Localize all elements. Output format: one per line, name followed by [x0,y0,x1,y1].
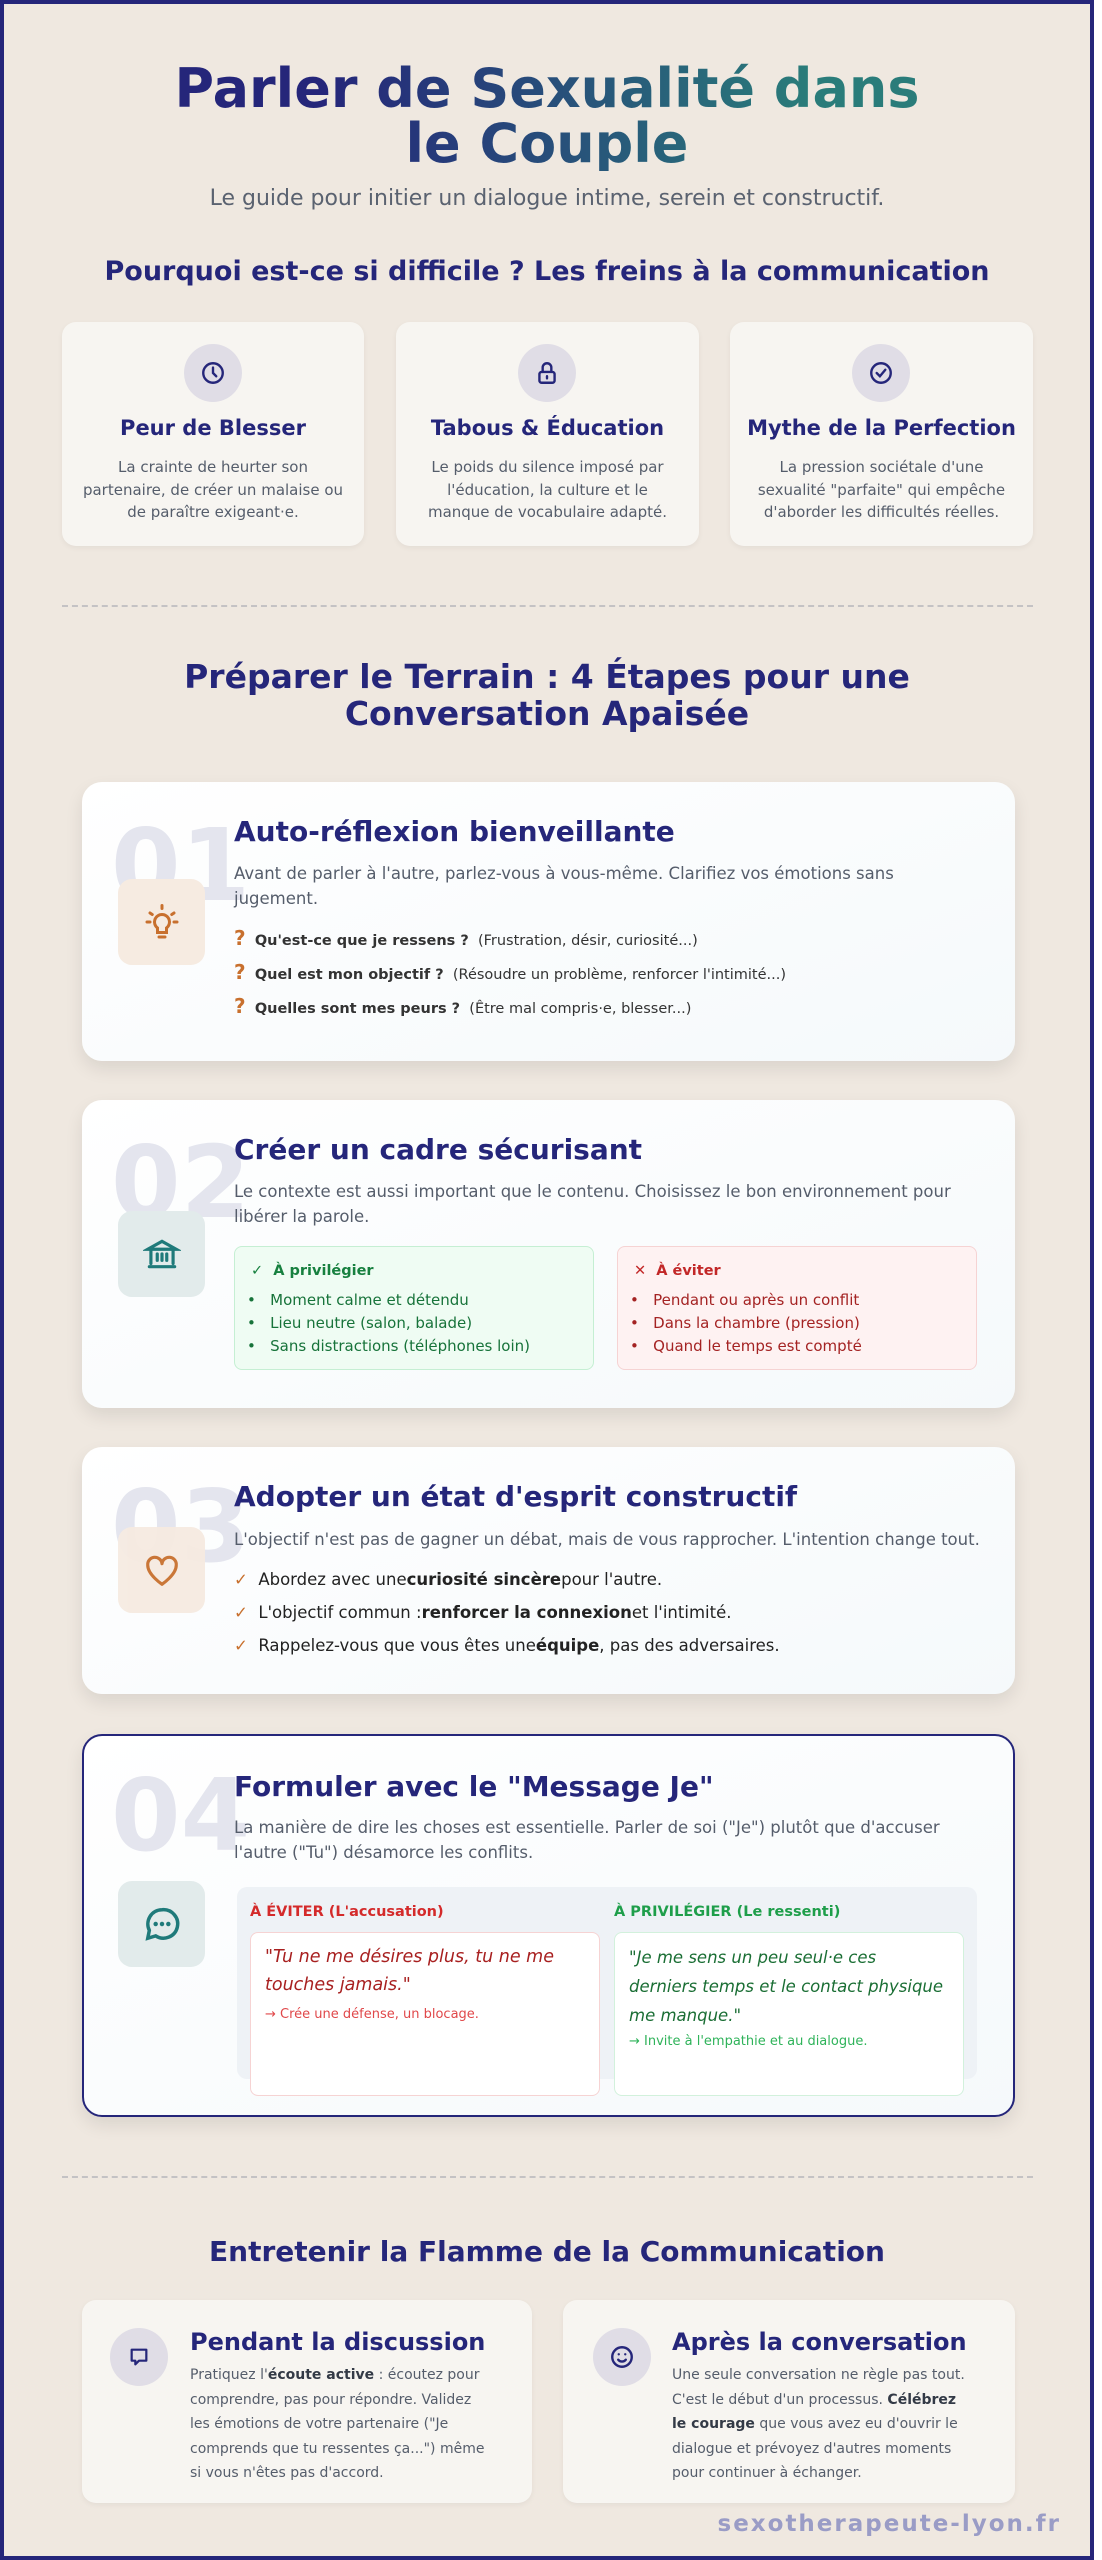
card text: manque de vocabulaire adapté. [428,503,667,521]
card text [428,458,667,521]
text: comprendre, pas pour répondre. Validez [190,2392,471,2408]
quote: je: "Je me sens un peu seul·e ces [629,1948,876,1967]
icon: lock [518,344,576,402]
box: à privilégier [234,1246,594,1370]
questions list: ? Quel est mon objectif ? (Résoudre un problème, renforcer l'intimité...) [234,960,786,984]
heading: freins: Pourquoi est-ce si difficile ? Les freins à la communication [104,256,990,287]
heading: entretenir: Entretenir la Flamme de la Communication [209,2235,885,2268]
quote: tu: touches jamais." [265,1975,411,1995]
panel: step 04 [82,1734,1015,2117]
title [174,57,920,175]
icon: smile [593,2328,651,2386]
number 04: 04 [111,1757,250,1874]
number 01: 01 [111,807,250,924]
icon: check circle [852,344,910,402]
panel: pendant [82,2300,532,2503]
icon: clock [184,344,242,402]
step text: l'autre ("Tu") désamorce les conflits. [234,1843,533,1862]
card text: sexualité "parfaite" qui empêche [758,480,1005,498]
title: le Couple [406,112,688,175]
quote: je [614,1932,964,2096]
text: comprends que tu ressentes ça...") même [190,2440,484,2456]
card text: La pression sociétale d'une [780,458,983,476]
step title: Créer un cadre sécurisant [234,1133,642,1166]
step text: libérer la parole. [234,1207,369,1226]
panel: mythe [730,322,1033,546]
panel: step 02 [82,1100,1015,1408]
checklist: ✓ L'objectif commun :renforcer la connexionet l'intimité. [234,1603,731,1622]
title: Après la conversation [672,2328,967,2356]
panel: step 01 [82,782,1015,1061]
box: à privilégier: • Sans distractions (téléphones loin) [247,1337,530,1355]
icon: chat [118,1881,205,1967]
text: Pratiquez l'écoute active : écoutez pour [190,2367,480,2383]
panel: après [563,2300,1015,2503]
step text [234,864,894,908]
heading: étapes: Préparer le Terrain : 4 Étapes pour une [184,657,910,696]
quote: je: → Invite à l'empathie et au dialogue. [629,2034,867,2049]
card text: de paraître exigeant·e. [127,503,299,521]
panel: step 03 [82,1447,1015,1694]
step text: L'objectif n'est pas de gagner un débat, mais de vous rapprocher. L'intention change tout. [234,1530,980,1549]
icon: heart [118,1527,205,1613]
step title: Auto-réflexion bienveillante [234,815,675,848]
quote: je: derniers temps et le contact physique [629,1977,943,1996]
box: à éviter [617,1246,977,1370]
comparison panel [237,1887,977,2079]
step text: Le contexte est aussi important que le contenu. Choisissez le bon environnement pour [234,1182,951,1201]
box: à privilégier: ✓ À privilégier [251,1263,374,1279]
icon: speech [110,2328,168,2386]
text: les émotions de votre partenaire ("Je [190,2416,448,2432]
checklist: ✓ Rappelez-vous que vous êtes uneéquipe, pas des adversaires. [234,1636,780,1655]
text: le courage que vous avez eu d'ouvrir le [672,2416,958,2432]
footer: sexotherapeute-lyon.fr [718,2511,1061,2537]
box: à éviter: • Quand le temps est compté [630,1337,862,1355]
quote: je: me manque." [629,2006,741,2025]
box: à privilégier: • Moment calme et détendu [247,1291,469,1309]
card text: d'aborder les difficultés réelles. [764,503,999,521]
card title: Tabous & Éducation [431,416,664,440]
text: pour continuer à échanger. [672,2465,862,2481]
box: à éviter: ✕ À éviter [634,1263,721,1279]
panel: peur de blesser [62,322,364,546]
quote: tu: → Crée une défense, un blocage. [265,2007,479,2022]
questions list: ? Qu'est-ce que je ressens ? (Frustration, désir, curiosité...) [234,926,698,950]
card title: Mythe de la Perfection [747,416,1016,440]
quote: tu: "Tu ne me désires plus, tu ne me [265,1947,554,1967]
box: à éviter: • Dans la chambre (pression) [630,1314,860,1332]
step text: La manière de dire les choses est essentielle. Parler de soi ("Je") plutôt que d'accuser [234,1818,940,1837]
step text [234,1182,951,1226]
icon: building [118,1211,205,1297]
title: Parler de Sexualité dans [174,57,920,120]
number 02: 02 [111,1124,250,1241]
subtitle: Le guide pour initier un dialogue intime, serein et constructif. [210,186,884,211]
number 03: 03 [111,1468,250,1585]
card text: La crainte de heurter son [118,458,308,476]
box: à privilégier: • Lieu neutre (salon, balade) [247,1314,472,1332]
card text: Le poids du silence imposé par [431,458,664,476]
text: C'est le début d'un processus. Célébrez [672,2392,956,2408]
quote: tu [250,1932,600,2096]
card title: Peur de Blesser [120,416,306,440]
step title: Adopter un état d'esprit constructif [234,1480,797,1513]
card text: partenaire, de créer un malaise ou [83,480,343,498]
label: éviter: À ÉVITER (L'accusation) [250,1904,444,1920]
step text: jugement. [234,889,318,908]
checklist: ✓ Abordez avec unecuriosité sincèrepour l'autre. [234,1570,662,1589]
card text [758,458,1005,521]
text: dialogue et prévoyez d'autres moments [672,2440,951,2456]
card text: l'éducation, la culture et le [447,480,648,498]
card text [83,458,343,521]
text [672,2367,965,2481]
icon: bulb [118,879,205,965]
label: privilégier: À PRIVILÉGIER (Le ressenti) [614,1904,840,1920]
step text [234,1818,940,1862]
questions list [234,926,786,1018]
box: à éviter: • Pendant ou après un conflit [630,1291,859,1309]
questions list: ? Quelles sont mes peurs ? (Être mal compris·e, blesser...) [234,994,691,1018]
heading: étapes [184,657,910,733]
step title: Formuler avec le "Message Je" [234,1770,714,1803]
panel: tabous [396,322,699,546]
heading: étapes: Conversation Apaisée [345,694,749,733]
title: Pendant la discussion [190,2328,485,2356]
text: Une seule conversation ne règle pas tout. [672,2367,965,2383]
step text: Avant de parler à l'autre, parlez-vous à vous-même. Clarifiez vos émotions sans [234,864,894,883]
text: si vous n'êtes pas d'accord. [190,2465,384,2481]
text [190,2367,484,2481]
checklist [234,1570,780,1655]
